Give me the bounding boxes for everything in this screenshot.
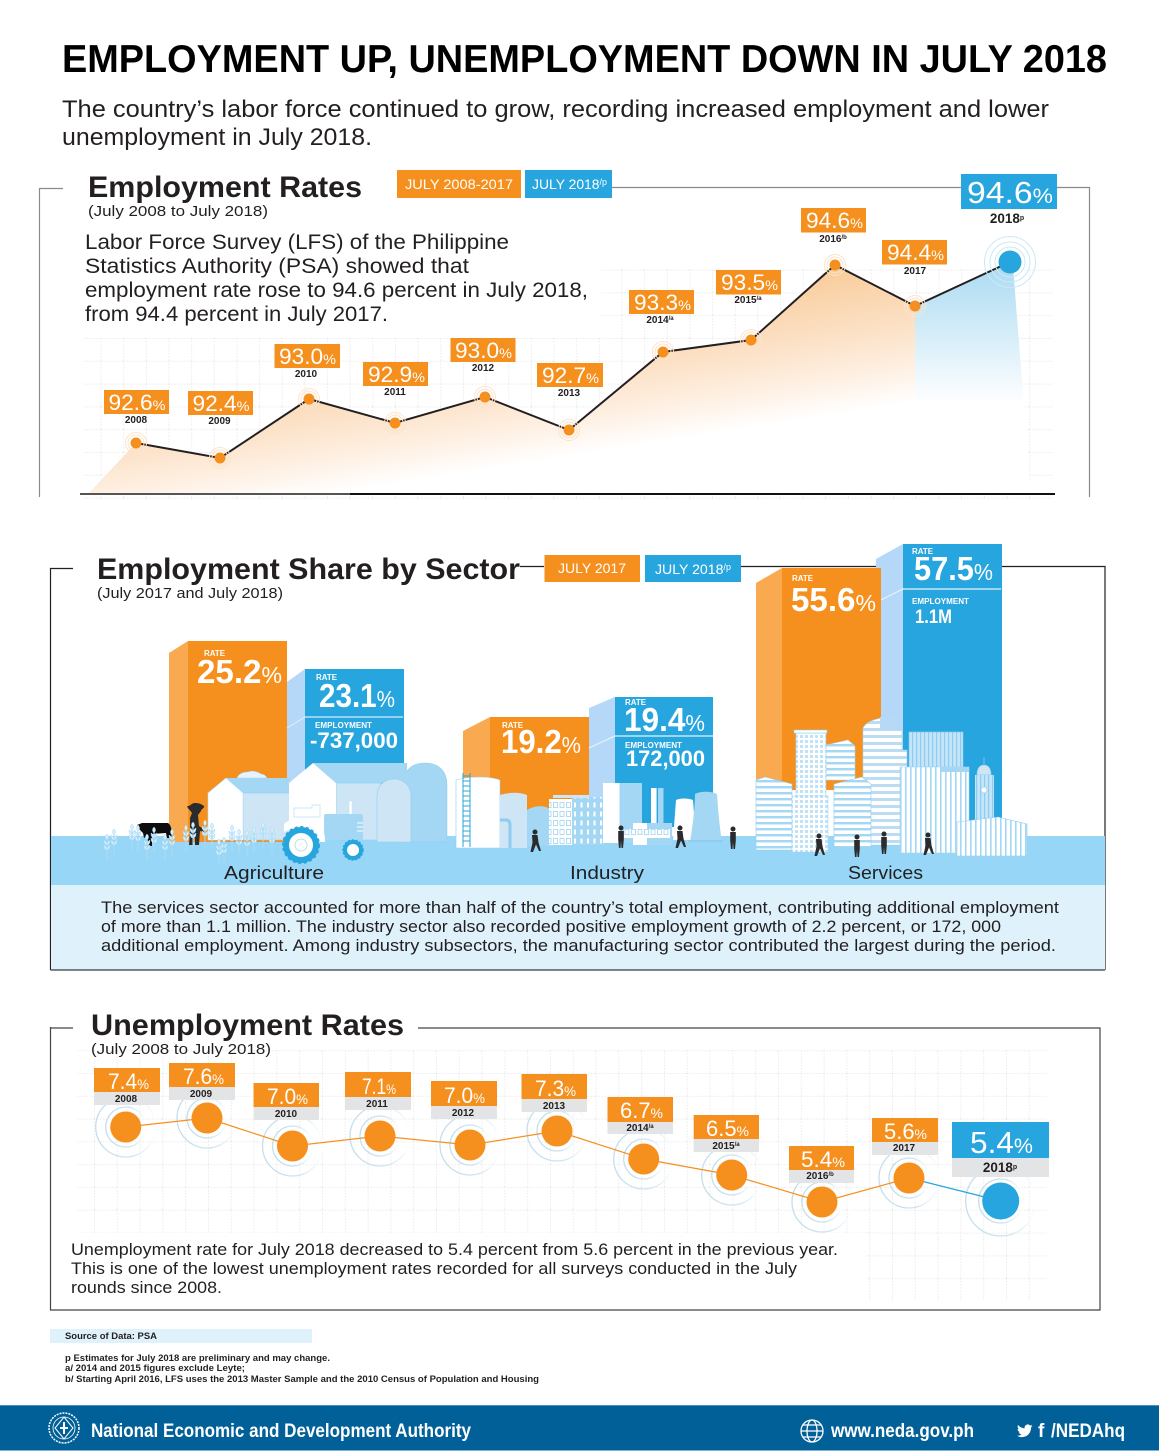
illustration: city skyline [756, 717, 1027, 856]
footnotes [65, 1353, 539, 1384]
unemployment description [71, 1240, 838, 1297]
sector description: additional employment. Among industry subsectors, the manufacturing sector contributed the largest during the period. [101, 936, 1056, 955]
sector labels: Services [848, 863, 923, 883]
value labels: 2017 [904, 266, 927, 277]
value labels: 2017 [893, 1143, 916, 1154]
icon: twitter [1017, 1424, 1033, 1437]
line chart: employment [80, 174, 1057, 494]
value labels: 6.7% [620, 1098, 663, 1123]
bars: industry: RATE [502, 721, 524, 730]
value labels: 2018 [990, 211, 1020, 226]
value labels: 94.6% [806, 208, 863, 233]
legend: JULY 2018 [655, 561, 723, 577]
bars: agriculture: RATE [316, 673, 338, 682]
footer [0, 1405, 1159, 1451]
point: 2018 [982, 1182, 1019, 1220]
value labels: /b [841, 235, 847, 241]
legend: /p [723, 562, 731, 572]
subheading: (July 2017 and July 2018) [97, 585, 283, 602]
value labels: 5.4% [970, 1125, 1033, 1160]
intro text: unemployment in July 2018. [62, 124, 372, 151]
value labels: 7.3% [535, 1076, 576, 1101]
footnotes: p Estimates for July 2018 are preliminary and may change. [65, 1353, 330, 1363]
value labels: 2008 [125, 415, 148, 426]
value labels: 7.1% [362, 1074, 396, 1099]
unemployment description: rounds since 2008. [71, 1278, 222, 1297]
sector labels: Agriculture [224, 863, 324, 883]
value labels: 2009 [208, 416, 231, 427]
value labels: 2012 [452, 1108, 475, 1119]
value labels: 93.5% [721, 270, 778, 295]
value labels: 2013 [543, 1101, 566, 1112]
panel: unemployment rates [50, 1009, 1100, 1310]
bars: agriculture: RATE [204, 649, 226, 658]
value labels: 2016 [806, 1171, 828, 1182]
chart: unemployment [94, 1063, 1049, 1236]
unemployment description: This is one of the lowest unemployment rates recorded for all surveys conducted in the July [71, 1259, 798, 1278]
legend: JULY 2017 [558, 560, 626, 576]
employment description: employment rate rose to 94.6 percent in July 2018, [85, 279, 588, 302]
value labels: 94.4% [887, 240, 944, 265]
bars: services: 1.1M [915, 607, 952, 628]
value labels: 2015 [712, 1141, 735, 1152]
value labels: 7.4% [108, 1069, 149, 1094]
icon: NEDA logo [49, 1413, 79, 1443]
bars: services: RATE [792, 574, 814, 583]
heading: unemployment rates: Unemployment Rates [91, 1009, 404, 1042]
unemployment description: Unemployment rate for July 2018 decreased to 5.4 percent from 5.6 percent in the previous year. [71, 1240, 838, 1259]
value labels: 2014 [626, 1123, 649, 1134]
value labels: 93.3% [634, 290, 691, 315]
agency name: National Economic and Development Authority [91, 1421, 471, 1442]
bars: industry: 19.4% [624, 701, 705, 738]
icon: 2018 highlighted point [984, 236, 1036, 288]
value labels: 92.6% [108, 390, 166, 415]
value labels: /a [735, 1142, 740, 1148]
employment description: from 94.4 percent in July 2017. [85, 303, 388, 326]
intro text: The country’s labor force continued to grow, recording increased employment and lower [62, 96, 1049, 123]
legend [397, 170, 612, 198]
bars: agriculture: -737,000 [310, 728, 398, 753]
employment description: Statistics Authority (PSA) showed that [85, 255, 469, 278]
legend: JULY 2018 [532, 176, 600, 192]
sector labels [224, 863, 923, 883]
value labels: 2013 [558, 388, 581, 399]
icons: people [530, 826, 934, 857]
value labels: /b [828, 1172, 834, 1178]
text panel background [51, 885, 1105, 970]
social handle: /NEDAhq [1051, 1421, 1125, 1442]
subheading: (July 2008 to July 2018) [88, 203, 268, 220]
value labels: 2011 [366, 1099, 388, 1110]
bars: agriculture: 25.2% [197, 653, 282, 690]
sector labels: Industry [570, 863, 644, 883]
sector description [101, 898, 1059, 955]
value labels: 93.0% [455, 338, 512, 363]
icon: farmer [187, 803, 205, 845]
icon: tractor [283, 801, 363, 863]
value labels: 2010 [275, 1109, 298, 1120]
footnotes: b/ Starting April 2016, LFS uses the 2013 Master Sample and the 2010 Census of Population and Housing [65, 1374, 539, 1384]
source of data [50, 1329, 312, 1343]
value labels: 92.7% [542, 363, 599, 388]
source of data: Source of Data: PSA [65, 1331, 158, 1341]
value labels: 5.6% [884, 1119, 927, 1144]
icon: cow [137, 823, 172, 846]
illustration: farm [208, 763, 447, 842]
intro text [62, 96, 1049, 151]
bars: agriculture [169, 641, 404, 842]
value labels: 2016 [819, 234, 841, 245]
bars: industry: EMPLOYMENT [625, 741, 682, 750]
legend: JULY 2008-2017 [405, 176, 513, 192]
value labels: 92.9% [368, 362, 425, 387]
value labels: 6.5% [706, 1116, 749, 1141]
icon: globe [801, 1420, 823, 1442]
bars: industry [463, 697, 713, 830]
bars: industry: 172,000 [626, 746, 705, 771]
title: EMPLOYMENT UP, UNEMPLOYMENT DOWN IN JULY 2018 [62, 38, 1107, 81]
value labels: 7.0% [444, 1083, 485, 1108]
sector description: The services sector accounted for more than half of the country’s total employment, contributing additional employment [101, 898, 1059, 917]
footnotes: a/ 2014 and 2015 figures exclude Leyte; [65, 1363, 245, 1373]
value labels: p [1013, 1164, 1017, 1171]
value labels: 2010 [295, 369, 318, 380]
value labels: 93.0% [279, 344, 336, 369]
sector description: of more than 1.1 million. The industry sector also recorded positive employment growth of 2.2 percent, or 172, 000 [101, 917, 1001, 936]
value labels: p [1020, 215, 1024, 222]
social handle: f [1038, 1421, 1045, 1442]
value labels [104, 174, 1057, 427]
illustration: factory [456, 773, 723, 848]
bars: industry: RATE [625, 698, 647, 707]
value labels: 94.6 % [967, 175, 1053, 210]
value labels: 2012 [472, 363, 495, 374]
value labels: 2018 [983, 1160, 1013, 1175]
value labels: /a [649, 1124, 654, 1130]
icons: wheat [104, 820, 275, 865]
value labels [94, 1063, 1049, 1183]
website: www.neda.gov.ph [830, 1421, 974, 1442]
value labels: /a [757, 296, 762, 302]
bars: services [756, 544, 1002, 834]
employment description: Labor Force Survey (LFS) of the Philippine [85, 231, 509, 254]
legend [544, 555, 741, 582]
value labels: 7.6% [183, 1064, 224, 1089]
value labels: 7.0% [267, 1084, 308, 1109]
bars: services: 55.6% [791, 581, 876, 618]
value labels: 2015 [734, 295, 757, 306]
employment description [85, 231, 588, 326]
value labels: 92.4% [192, 391, 250, 416]
ground band [51, 836, 1105, 885]
panel: employment rates [40, 170, 1090, 500]
bars: services: RATE [912, 547, 934, 556]
value labels: 5.4% [801, 1147, 845, 1172]
value labels: 2014 [646, 315, 669, 326]
heading: employment share: Employment Share by Sector [97, 553, 520, 586]
bars: industry: 19.2% [501, 723, 581, 760]
bars: agriculture: 23.1% [319, 677, 395, 714]
value labels: 2009 [190, 1089, 213, 1100]
panel: employment share by sector [50, 544, 1105, 970]
value labels: 2011 [384, 387, 406, 398]
bars: services: EMPLOYMENT [912, 597, 969, 606]
heading: employment rates: Employment Rates [88, 171, 362, 204]
bars: services: 57.5% [914, 550, 993, 587]
legend: /p [600, 177, 607, 187]
subheading: (July 2008 to July 2018) [91, 1041, 271, 1058]
value labels: /a [669, 316, 674, 322]
bars: agriculture: EMPLOYMENT [315, 721, 372, 730]
value labels: 2008 [115, 1094, 138, 1105]
